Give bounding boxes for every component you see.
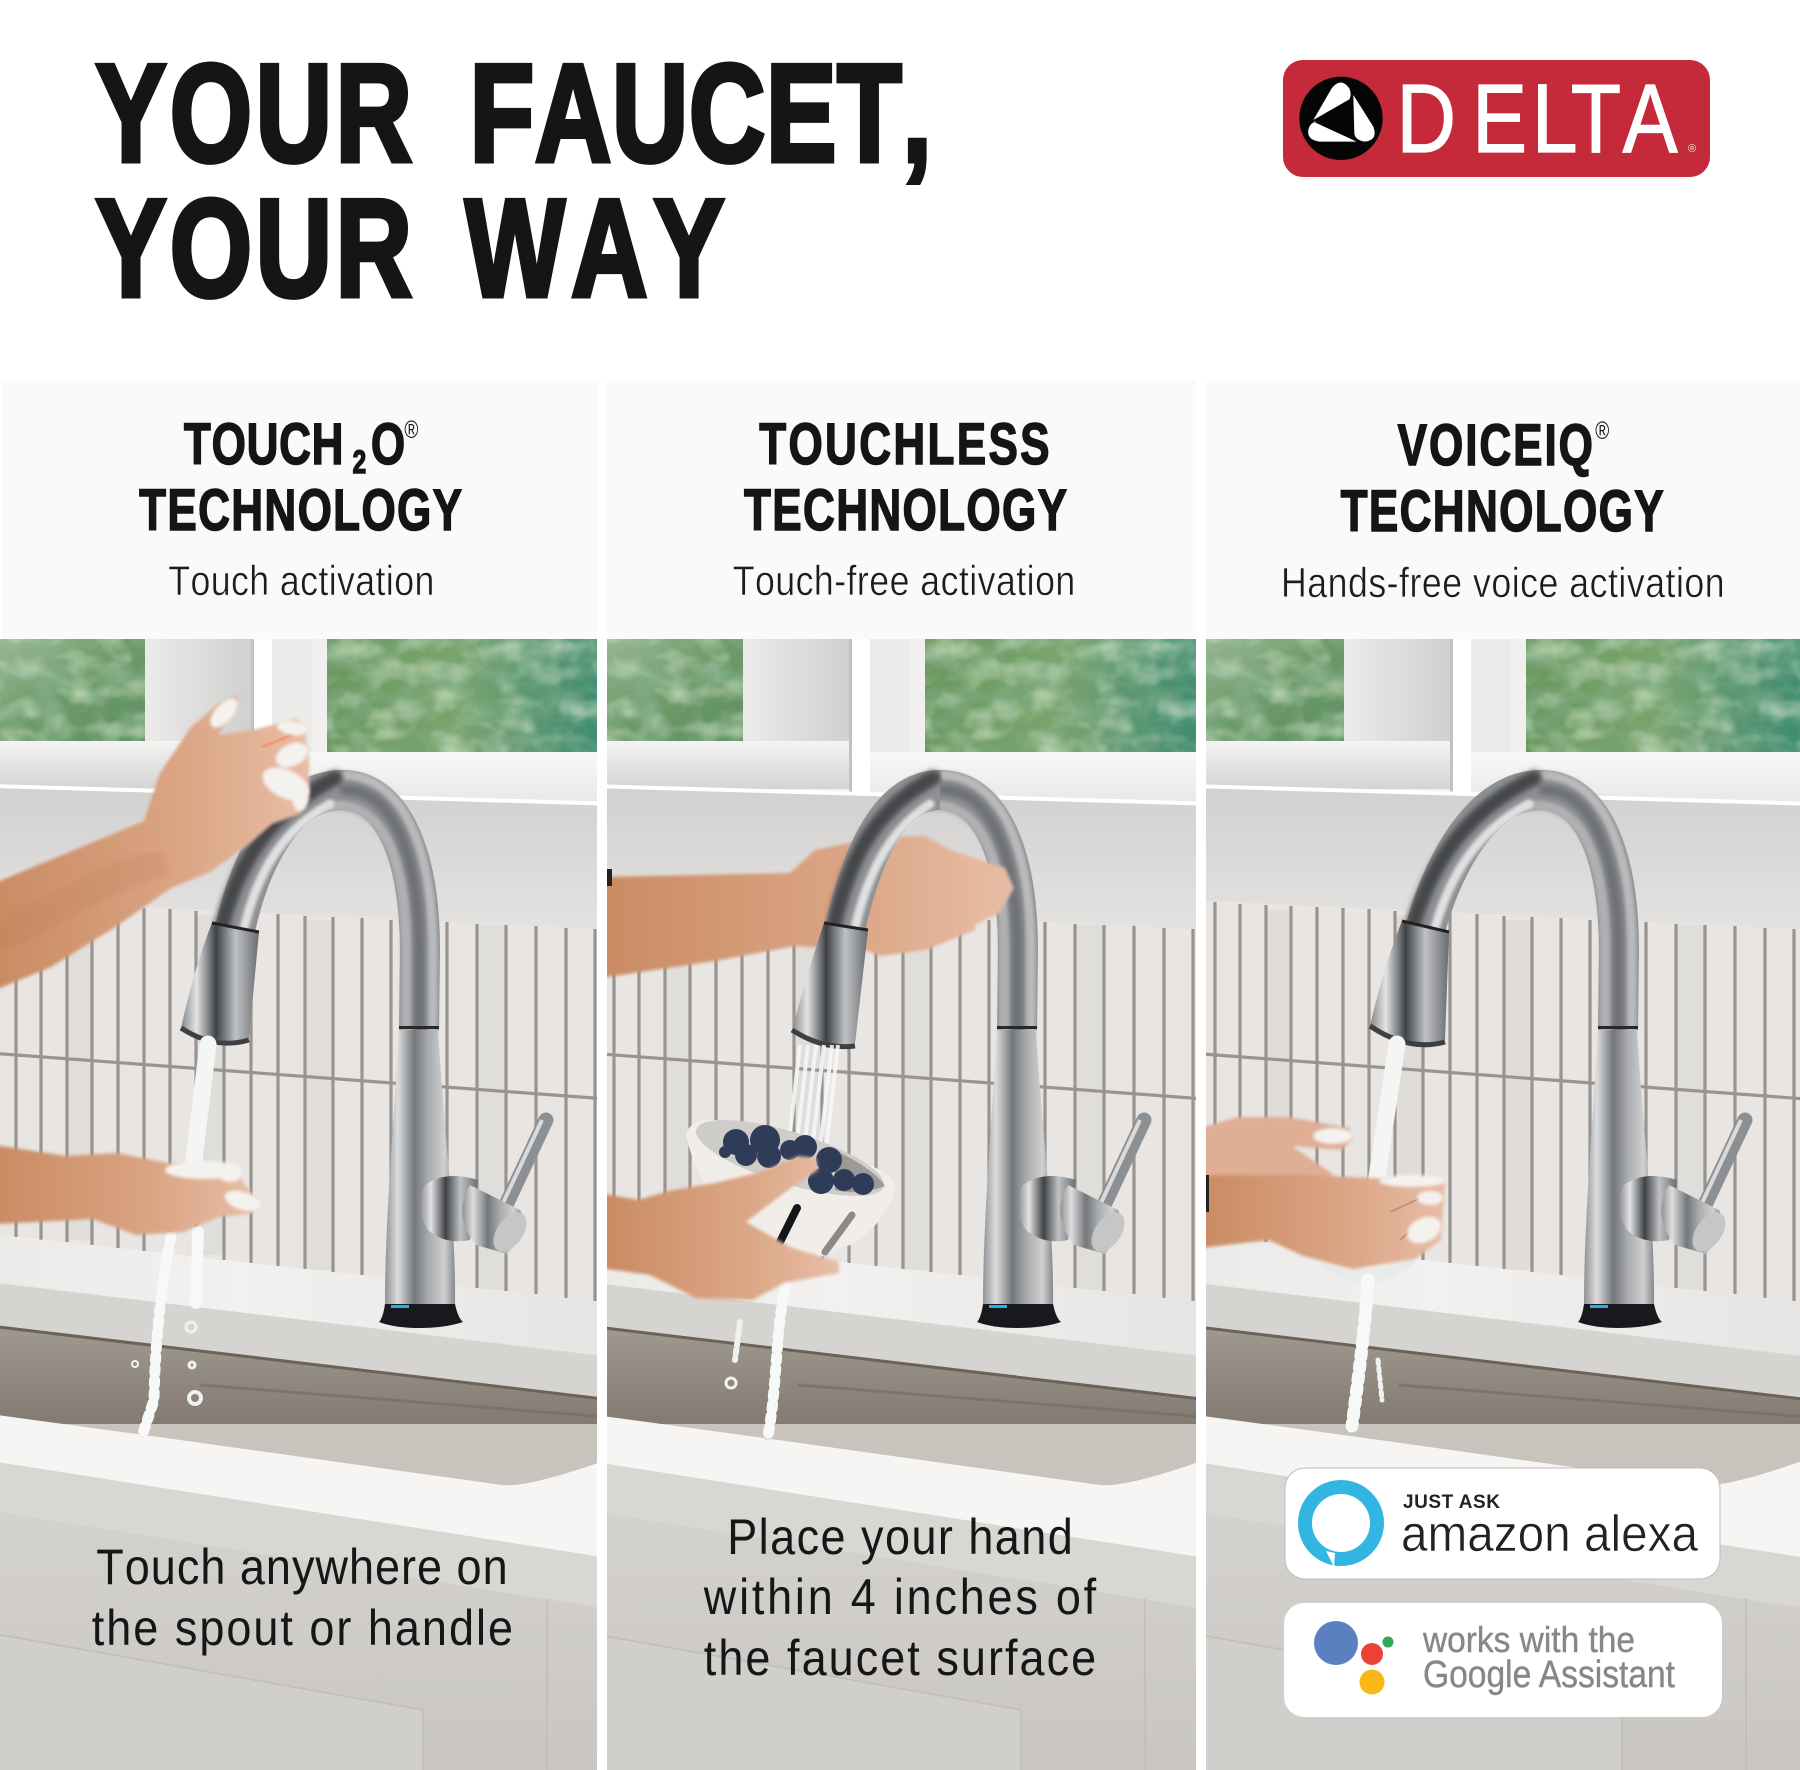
panel: VoiceIQ technology xyxy=(1189,381,1800,1770)
caption: within 4 inches of xyxy=(703,1570,1097,1626)
heading xyxy=(1341,412,1664,543)
icon: Delta triangle mark xyxy=(1299,77,1383,160)
header card xyxy=(1206,381,1800,639)
caption xyxy=(703,1510,1097,1687)
subheading: Touch activation xyxy=(168,558,434,605)
heading: ® xyxy=(1595,416,1609,445)
upper hand and arm xyxy=(600,836,1014,978)
heading: TECHNOLOGY xyxy=(139,477,462,542)
photo: washing hands under faucet xyxy=(1189,639,1800,1770)
faucet xyxy=(1370,775,1745,1328)
bowl of blueberries xyxy=(686,1120,895,1257)
caption: Touch anywhere on xyxy=(96,1540,508,1596)
upper hand and arm xyxy=(0,694,315,990)
water splash xyxy=(132,1232,201,1433)
works with the: works with the xyxy=(1422,1619,1635,1660)
badge: Google Assistant xyxy=(1284,1603,1722,1717)
title: FAUCET, xyxy=(470,36,932,191)
lower hand and arm xyxy=(600,1156,839,1300)
title: YOUR xyxy=(96,171,412,326)
header card xyxy=(2,381,597,639)
header card xyxy=(607,381,1196,639)
photo: touching the spout with soapy hand xyxy=(0,639,630,1770)
heading xyxy=(139,411,462,542)
faucet xyxy=(792,778,1144,1328)
subheading: Hands-free voice activation xyxy=(1281,560,1725,607)
title: WAY xyxy=(465,171,724,326)
title xyxy=(96,36,932,326)
water splash xyxy=(1346,1262,1414,1432)
heading: VOICEIQ xyxy=(1398,412,1593,477)
heading xyxy=(744,411,1067,542)
heading: 2 xyxy=(353,445,366,481)
heading: TOUCH xyxy=(184,411,344,476)
subheading: Touch-free activation xyxy=(733,558,1075,605)
caption: the spout or handle xyxy=(92,1601,513,1657)
heading: ® xyxy=(404,415,418,444)
water spray xyxy=(788,1045,838,1150)
caption: Place your hand xyxy=(727,1510,1073,1566)
icon: Alexa ring xyxy=(1305,1487,1377,1567)
water stream xyxy=(1375,1044,1397,1190)
caption xyxy=(92,1540,513,1657)
wordmark: DELTA xyxy=(1397,66,1678,174)
faucet xyxy=(181,775,546,1328)
photo: hand near faucet and bowl of blueberries xyxy=(588,639,1228,1770)
registered mark: ® xyxy=(1688,143,1696,155)
hands xyxy=(1200,1117,1445,1269)
heading: O xyxy=(371,411,405,476)
heading: TECHNOLOGY xyxy=(1341,478,1664,543)
water stream xyxy=(193,1044,208,1168)
logo: Delta xyxy=(1283,60,1710,177)
panel: Touchless technology xyxy=(607,422,1196,1770)
amazon alexa: amazon alexa xyxy=(1401,1505,1699,1562)
panel: Touch2O technology xyxy=(0,381,630,1770)
title: YOUR xyxy=(96,36,412,191)
caption: the faucet surface xyxy=(704,1631,1096,1687)
heading: TOUCHLESS xyxy=(759,411,1050,476)
icon: Google Assistant dots xyxy=(1314,1621,1394,1694)
Google Assistant: Google Assistant xyxy=(1423,1654,1675,1696)
badge: Amazon Alexa xyxy=(1285,1468,1720,1579)
water splash xyxy=(726,1285,786,1436)
just ask: JUST ASK xyxy=(1403,1492,1500,1513)
heading: TECHNOLOGY xyxy=(744,477,1067,542)
lower hand and arm xyxy=(0,1145,264,1235)
